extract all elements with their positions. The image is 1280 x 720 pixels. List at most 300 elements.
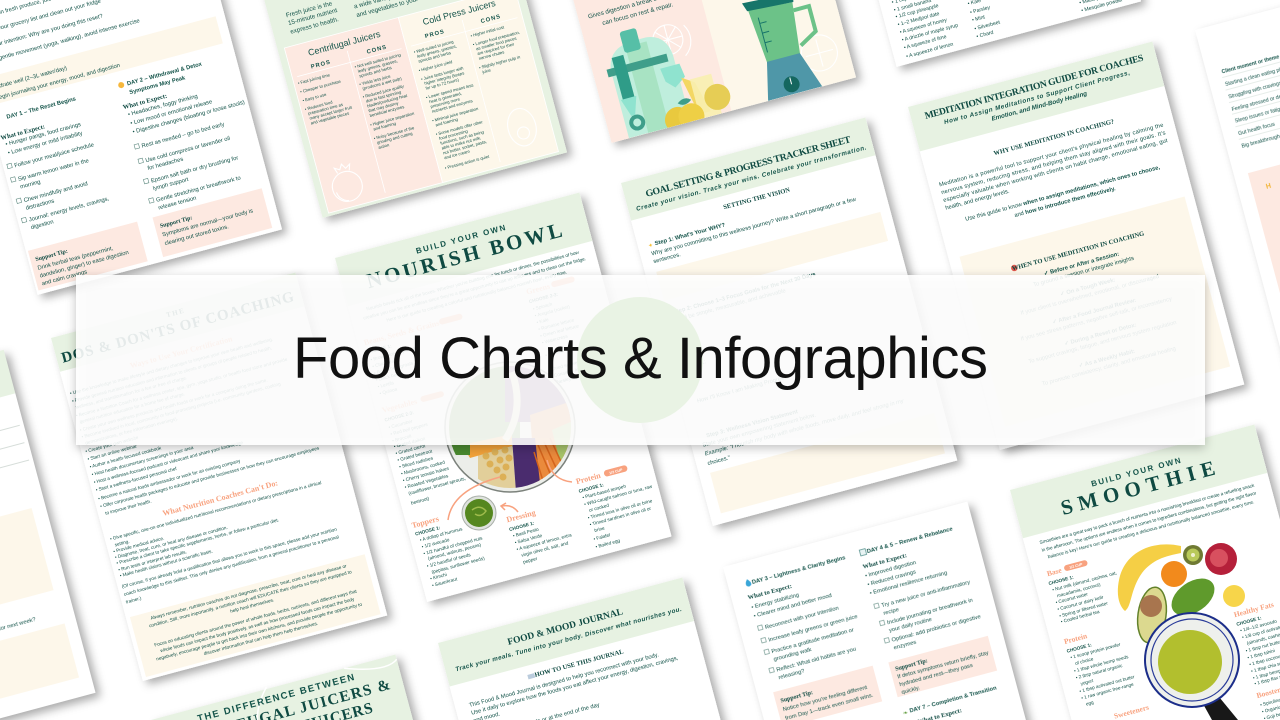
section: healthy fats: • 1 tbsp tahini — [1247, 648, 1275, 660]
section: base — [1045, 552, 1126, 625]
header band: DOS & DON'TS OF COACHING — [60, 289, 296, 367]
section: healthy fats: Healthy Fats — [1233, 600, 1275, 619]
step 2: Should be simple, measurable, and achievable — [669, 288, 787, 325]
section: vegetables: • Mushrooms, cooked — [400, 460, 446, 476]
section: dressing: Dressing — [505, 508, 536, 524]
section: dressing: • Basil Pesto — [512, 527, 540, 538]
section: toppers: (almond, walnuts, pecans) — [427, 542, 482, 561]
panel: when to use: ✓ Before or After a Session: — [1043, 251, 1120, 277]
section: toppers: • 1/2 handful of chopped nuts — [423, 535, 484, 556]
icon: lemon outline right — [797, 31, 842, 75]
list: can do — [85, 390, 322, 517]
section: dressing: • A squeeze of lemon, extra — [516, 532, 573, 552]
section: grains: • Lentils — [377, 380, 395, 389]
intro paragraph: health, and energy levels. — [945, 189, 1011, 212]
step 2: Step 2: Choose 1–3 Focus Goals for the Next 30 Days — [673, 272, 816, 316]
arrow: dressing to pesto — [501, 503, 518, 512]
panel: cold press juicers: and ice cream — [444, 148, 471, 160]
juicer caption — [587, 0, 689, 30]
panel: centrifugal juicers: blades/producing heat — [367, 93, 408, 108]
panel: centrifugal juicers: due to fast spinning — [365, 89, 402, 104]
section: vegetables: Vegetables — [381, 397, 418, 415]
panel: cold press juicers: narrow chutes — [478, 49, 505, 61]
day 2 support tip: Symptoms are normal—your body is — [162, 208, 254, 238]
step 2: How I'll Know I am Making Progress: — [696, 374, 789, 405]
day 4 and 5 column: Optional: add probiotics or digestive — [891, 614, 982, 644]
day 1 support tip: Support Tip: — [35, 249, 69, 263]
section heading: SETTING THE VISION — [723, 187, 791, 211]
section: base: 1/2 CUP — [1069, 562, 1084, 570]
list: fruit and sweeteners: • A drizzle of maple syrup — [901, 23, 959, 43]
intro paragraph: Meditation is a powerful tool to support your client's physical healing by calming the — [939, 123, 1164, 188]
page: detox plan days 1 and 2 — [0, 0, 282, 295]
day 2 column: Symptoms May Peak — [129, 75, 187, 96]
panel: centrifugal juicers: and foaming — [373, 121, 397, 132]
day 2 column: What to Expect: — [122, 93, 168, 111]
day 4 and 5 column: enzymes — [893, 640, 917, 651]
section: vegetables: • Cherry tomato halves — [402, 466, 450, 483]
intro paragraph — [939, 123, 1177, 236]
section: greens: • Watercress — [541, 333, 569, 345]
panel: cold press juicers: leafy greens, grasses, — [416, 43, 457, 59]
section: protein: • Tinned sardines in olive oil or — [589, 506, 652, 527]
section: greens: • Parsley leaves — [552, 372, 586, 386]
how to use heading: HOW TO USE THIS JOURNAL — [534, 648, 625, 679]
section: ways to use certification: general nutrition education for a home fee of charge. — [79, 391, 186, 424]
step 3: choices." — [707, 455, 731, 467]
banner title: Food Charts & Infographics — [293, 326, 988, 391]
panel: centrifugal juicers: • Fast juicing time — [297, 72, 331, 86]
day 3 support tip — [773, 666, 882, 720]
section: dressing: pepper — [522, 556, 538, 565]
header band: GOAL SETTING & PROGRESS TRACKER SHEET — [644, 134, 852, 200]
list: greens: • Parsley — [969, 5, 991, 16]
section: vegetables: • Grated carrot — [395, 443, 426, 456]
pink panel: H — [1265, 183, 1272, 191]
panel: centrifugal juicers: leafy greens, grasses, — [357, 58, 398, 74]
section: greens: • Arugula (rocket) — [534, 304, 571, 318]
list: cannot do: • Run tests or interpret lab results. — [118, 549, 187, 572]
icon: open book — [527, 673, 535, 679]
panel: centrifugal juicers: and vegetable pieces — [310, 111, 350, 126]
icon: pomegranate outline — [327, 160, 366, 205]
step 1: Step 1: What's Your WHY? — [654, 222, 726, 247]
panel: centrifugal juicers: beneficial enzymes — [369, 104, 405, 118]
section: toppers — [411, 504, 492, 589]
icon: sun — [118, 81, 125, 89]
cream reminder box: negatively, encourage people to get back into their own kitchens, and provide people the opportunity to — [156, 602, 363, 662]
section: greens: CHOOSE 2-3: — [528, 292, 559, 304]
day 1 column: • Hunger pangs, food cravings — [5, 122, 82, 148]
section: vegetables: (cauliflower, brussel sprouts, — [408, 476, 466, 496]
panel: centrifugal juicers: preparation time as — [307, 102, 343, 116]
illustration: smoothie ingredients — [1118, 543, 1245, 645]
day 4 and 5 column: • Emotional resilience returning — [869, 570, 948, 597]
section: grains: • Quinoa — [379, 386, 398, 396]
section: protein: • Wild-caught salmon or tuna, raw — [584, 484, 653, 507]
panel: cold press juicers: • Minimal juice separation — [432, 106, 479, 123]
section: greens: • Dried seaweed — [549, 358, 583, 372]
panel: when to use: If your client is overwhelmed, emotional, or discouraged — [1020, 274, 1160, 317]
list: can do: • Start a wellness-focused personal chef — [95, 466, 178, 492]
title — [166, 664, 397, 720]
intro text: Smoothies are a great way to pack a bunch of nutrients into a nourishing breakfast or create a refueling snack — [1039, 483, 1255, 545]
header band — [621, 118, 875, 221]
day 1 column: morning — [20, 179, 41, 191]
section: base: CHOOSE 1: — [1048, 575, 1075, 586]
list: can do: • Offer corporate health packages to educate and provide businesses on how they can encourage employees — [100, 445, 320, 509]
panel: centrifugal juicers: PROS — [310, 60, 332, 71]
panel: cold press juicers: food processing — [438, 128, 469, 141]
cream note box — [0, 16, 223, 104]
section: greens: • Coriander leaves — [550, 364, 589, 379]
list: cannot do: trainer.) — [125, 595, 142, 605]
section: vegetables: CHOOSE 2-3: — [384, 410, 415, 423]
intro text: Nourish bowls tick all of the boxes. Whether you're building one for lunch or dinner, the possibilities of how — [366, 250, 580, 312]
section: vegetables: beetroot) — [410, 496, 430, 506]
day 4 and 5 column: What to Expect: — [862, 552, 908, 571]
day 3 column: Practice a gratitude meditation or — [771, 627, 855, 655]
section: grains: CHOOSE 1: — [366, 343, 393, 355]
panel: centrifugal juicers: grinding and cutting — [376, 131, 414, 145]
section: base: • Cooled herbal tea — [1060, 609, 1100, 624]
section: greens: • Spinach — [532, 301, 553, 311]
day 2 column: DAY 2 – Withdrawal & Detox — [126, 61, 203, 87]
section: ways to use certification: demonstrations, or free information evenings). — [85, 416, 178, 446]
day 4 and 5 column: DAY 4 & 5 – Renew & Rebalance — [866, 526, 954, 555]
panel: cold press juicers: heat is generated, — [429, 91, 462, 104]
step 3: State your own empowering statement below. — [702, 413, 817, 449]
page: detox plan days 3 to 7 — [723, 502, 1059, 720]
panel: when to use: ✓ During a Reset or Detox: — [1064, 322, 1137, 347]
table — [1220, 42, 1280, 150]
header band — [438, 578, 694, 686]
list: greens: • Mint — [971, 14, 986, 24]
panel: cold press juicers: • Some models offer other — [435, 119, 484, 137]
icon: water drop — [745, 578, 752, 587]
panel: cold press juicers: for up to 72 hours) — [425, 77, 460, 91]
section: ways to use certification: • Create your own wellness products and health foods or work for a company doing the same. — [79, 377, 268, 433]
panel: centrifugal juicers: • Noisy because of the — [373, 125, 415, 141]
section: protein: egg — [1085, 700, 1095, 707]
list: cannot do: • Prescribe a client to take specific supplements, herbs, or follow a particular diet. — [116, 517, 280, 566]
day 4 and 5 column: your daily routine — [888, 617, 933, 634]
section: base: • Nut milk (almond, cashew, oat, — [1052, 570, 1117, 592]
panel: cold press juicers: preserving more — [430, 96, 461, 109]
section: grains: Beans, Seeds & Grains — [363, 318, 440, 347]
day 4 and 5 column: • Improved digestion — [865, 560, 917, 579]
day 3 support tip: Support Tip: — [780, 690, 814, 705]
day 4 and 5 support tip: If detox symptoms return briefly, stay — [897, 650, 990, 680]
day 1 support tip: Drink herbal teas (peppermint, — [37, 246, 114, 272]
section: grains: • Black beans — [375, 370, 405, 382]
page: dos and donts of coaching — [51, 273, 387, 681]
day 1 column: • Low energy or mild irritability — [7, 131, 83, 157]
juicer caption: can focus on rest & repair. — [602, 1, 674, 27]
cream box lower — [0, 623, 79, 720]
day 4 and 5 column: Include journaling or breathwork in — [886, 598, 974, 626]
day 1 column — [0, 95, 112, 233]
header band — [0, 350, 15, 456]
intro paragraph: Use this guide to know when to assign meditations, which ones to choose, — [965, 165, 1161, 223]
section: dressing: CHOOSE 1: — [509, 520, 535, 532]
day 1 column: Journal: energy levels, cravings, — [28, 196, 110, 223]
section: vegetables: • Cucumber — [388, 418, 413, 430]
day 2 column: • Headaches, foggy thinking — [127, 94, 199, 118]
section: protein — [1063, 622, 1139, 708]
section: grains: • Chickpeas — [372, 358, 398, 369]
page: juicer difference poster — [150, 653, 421, 720]
day 2 column: release tension — [158, 196, 197, 212]
day 4 and 5 column — [859, 525, 984, 654]
panel: cold press juicers: nut butter, sorbet, pasta, — [442, 139, 487, 155]
panel: cold press juicers: sprouts and herbs — [418, 50, 451, 64]
section: vegetables: • Red bell peppers — [390, 422, 429, 437]
panel: cold press juicers: CONS — [480, 14, 502, 25]
section: greens — [525, 275, 600, 386]
section: protein: • Plant-based tempeh — [582, 483, 627, 500]
step 1 — [647, 183, 888, 301]
section: vegetables: • Sliced radishes — [399, 455, 434, 469]
section: vegetables: • Roasted Vegetables — [404, 473, 449, 490]
section: protein: • Falafel — [593, 532, 611, 542]
step 3: Example: "I nourish my body with whole foods, move daily, and feel strong in my — [704, 398, 906, 457]
list: can do: • Create your own website — [85, 435, 139, 454]
day 3 column: • Clearer mind and better mood — [753, 593, 833, 620]
cream reminder box: whole foods can impact the body positively, as well as how processed foods can impact the body — [160, 596, 355, 653]
header band: Emotion, and Mind-Body Healing — [991, 90, 1088, 123]
panel: when to use: To promote consistency, clarity, and emotional healing — [1042, 346, 1177, 388]
day 1 column: digestion — [30, 219, 54, 231]
list: greens: • Chard — [976, 30, 994, 40]
section: protein: Protein — [1063, 631, 1089, 646]
section: dressing: • Salsa Verde — [514, 533, 543, 545]
day 2 support tip: clearing out stored toxins. — [164, 224, 230, 247]
section: toppers: Toppers — [411, 514, 440, 530]
panel: when to use: ✓ After a Food Journal Review: — [1052, 298, 1137, 326]
panel: centrifugal juicers: • Easy to use — [302, 92, 328, 103]
panel: centrifugal juicers: • Cheaper to purchase — [300, 78, 342, 94]
day 4 and 5 support tip: Support Tip: — [895, 658, 928, 673]
section: protein: • Tinned tuna in olive oil or brine — [587, 498, 653, 520]
step 3: Step 3: Wellness Vision Statement — [706, 409, 799, 439]
day 4 and 5 column: • Reduced cravings — [867, 569, 917, 588]
day 1 support tip: dandelion, ginger) to ease digestion — [39, 250, 130, 280]
list: fruit and sweeteners: • A squeeze of honey — [899, 17, 948, 36]
section: toppers: CHOOSE 1: — [415, 525, 441, 537]
cream reminder box: discover information that can help them help themselves. — [203, 621, 319, 656]
list: cannot do: • Give specific, one-on-one individualized nutritional recommendations or dietary prescriptions in a clinical — [109, 480, 322, 541]
section: toppers: • 1/2 avocado — [421, 537, 450, 549]
illustration: pesto dish — [462, 496, 496, 530]
section: protein: CHOOSE 1: — [578, 482, 605, 494]
section: protein: • 1 tbsp whole hemp seeds — [1073, 654, 1130, 674]
cream box upper — [0, 508, 54, 647]
day 2 support tip: Support Tip: — [159, 215, 193, 230]
table: Gut health focus — [1238, 122, 1276, 137]
panel: cold press juicers: PROS — [424, 29, 446, 40]
day 3 column: • Energy stabilizing — [751, 592, 800, 611]
day 4 and 5 column: Try a new juice or anti-inflammatory — [881, 580, 971, 609]
section: vegetables: • Broccoli — [392, 433, 412, 443]
section: ways to use certification: • Become involved in local, community or food-promoting projects (i.e. community gardens, cooking — [81, 381, 282, 439]
day 3 column: Increase leafy greens or green juice — [768, 614, 858, 644]
section: grains — [363, 312, 477, 397]
section: grains: • Buckwheat groats — [374, 360, 414, 376]
panel: cold press juicers: • Juice lasts longer with — [420, 65, 464, 82]
panel: cold press juicers: as smaller food pieces — [475, 36, 517, 51]
panel: centrifugal juicers: • Reduced juice quality — [362, 83, 405, 99]
day 2 column — [117, 53, 266, 214]
cream reminder box: Focus on educating clients around the power of whole foods, herbs, nutrients, and different ways that — [154, 588, 358, 648]
list: greens: • Silverbeet — [974, 20, 1001, 32]
panel: cold press juicers: functions, such as being — [440, 129, 485, 146]
section: protein: 1/2 CUP — [609, 468, 624, 475]
section: toppers: • A dollop of hummus — [419, 526, 464, 543]
day 3 column: Reconnect with your intention — [764, 606, 840, 631]
banner green circle — [577, 297, 703, 423]
cream reminder box: help heal themselves. — [230, 597, 275, 614]
day 3 column: Reflect: What old habits are you — [776, 646, 857, 674]
cream reminder box — [130, 554, 381, 677]
section: greens: • Green leaf lettuce — [540, 323, 580, 338]
panel: centrifugal juicers: sprouts and herbs — [359, 65, 392, 78]
panel: when to use: ✓ On a Tough Week: — [1060, 277, 1116, 298]
header band — [1010, 425, 1267, 538]
panel: cold press juicers: • Pressing action is quiet — [444, 154, 490, 170]
header band: BUILD YOUR OWN — [415, 223, 508, 256]
panel: centrifugal juicers: Centrifugal Juicers — [307, 29, 382, 58]
illustration: nourish bowl — [445, 362, 575, 492]
header band: NOURISH BOWL — [364, 217, 568, 293]
list: cannot do: • Provide medical advice. — [113, 536, 165, 554]
day 2 column: • Low mood or emotional release — [130, 99, 213, 127]
day 1 column: distractions — [25, 198, 55, 212]
section: protein: • 1 raw organic free-range — [1081, 682, 1134, 701]
section: protein: Protein — [575, 471, 602, 486]
section: base: macadamia, coconut) — [1056, 582, 1101, 598]
list: fruit and sweeteners: • A squeeze of lime — [903, 34, 947, 51]
header band: BUILD YOUR OWN — [1090, 456, 1183, 489]
header band: THE — [165, 306, 186, 319]
panel: cold press juicers: and foaming — [435, 116, 459, 127]
list: can do: • Author a health-focused cookbook — [89, 445, 162, 469]
section: vegetables: • Grated daikon — [393, 436, 426, 449]
section: vegetables: • Grated beetroot — [397, 448, 433, 463]
panel: cold press juicers: • Higher juice yield — [418, 59, 453, 73]
panel: centrifugal juicers: CONS — [366, 44, 388, 56]
section: protein — [575, 459, 665, 550]
day 1 support tip: and calm cravings — [41, 269, 88, 287]
cream reminder box: condition. Still, more importantly, a nutrition coach will EDUCATE their clients so they are equipped to — [148, 569, 353, 628]
writing lines — [0, 425, 29, 491]
section: ways to use certification: • Provide general nutrition education and information to clients or groups of people related to health, — [71, 345, 272, 404]
panel: when to use — [960, 196, 1230, 427]
day 1 column: Sip warm lemon water in the — [17, 158, 90, 183]
panel: when to use: If you see stress patterns, negative self-talk, or inconsistency — [1020, 296, 1173, 343]
panel: when to use: WHEN TO USE MEDITATION IN COACHING — [1011, 230, 1145, 272]
panel: centrifugal juicers: action — [378, 142, 390, 150]
panel: when to use: To support cravings, fatigue, and nervous system regulation — [1028, 320, 1177, 365]
page: left partial worksheet — [0, 350, 96, 720]
section: grains: • Brown rice or quinoa — [370, 345, 416, 362]
section: protein: of choice — [1074, 656, 1094, 666]
panel: cold press juicers: nutrients and enzymes — [431, 98, 473, 114]
intro text: balance is key! Here's our guide to creating a delicious and nutritionally balanced smoothie, every time. — [1047, 499, 1255, 559]
panel: centrifugal juicers: that may destroy — [368, 100, 400, 113]
section: ways to use certification: Ways to Use Your Certification — [129, 334, 234, 370]
intro text: creative you can be are endless since they're a great opportunity to use up leftovers and to clean out the fridge. — [363, 256, 587, 321]
section: protein: or cooked — [588, 503, 610, 513]
day 3 column: releasing? — [778, 668, 806, 681]
day 7 heading: DAY 7 – Completion & Transition — [909, 685, 998, 714]
page: food and mood journal — [438, 578, 774, 720]
section: greens: • Sprouts — [545, 348, 565, 358]
list: greens — [965, 0, 1011, 40]
icon: avocado outline — [504, 105, 540, 149]
section: base: • Spring or filtered water — [1059, 601, 1109, 618]
panel: cold press juicers: juice — [481, 67, 492, 75]
panel: cold press juicers: • Lower speed means less — [425, 82, 474, 100]
list: cannot do: • Diagnose, treat, cure, or heal any disease or condition. — [114, 525, 228, 560]
list: fruit and sweeteners: • 1–2 Medjool date — [897, 11, 940, 28]
illustration: blender — [742, 0, 830, 101]
section: greens: • Romaine lettuce — [538, 317, 575, 332]
day 1 column: DAY 1 – The Reset Begins — [6, 96, 77, 121]
section: ways to use certification — [66, 322, 296, 446]
section: protein: • 1 scoop protein powder — [1070, 642, 1121, 660]
intro text — [285, 0, 432, 37]
day 1 support tip — [28, 222, 148, 290]
intro text: 15-minute nutrient — [287, 7, 338, 27]
panel: centrifugal juicers: • Higher juice separation — [370, 111, 415, 127]
section: greens: Greens — [525, 282, 551, 296]
day 7 heading: ❧ — [903, 710, 909, 717]
step 2 — [667, 272, 840, 406]
page: juicer and blender illustration — [572, 0, 865, 150]
section: healthy fats — [1233, 596, 1280, 687]
panel: centrifugal juicers: (produces a wet pulp) — [362, 76, 403, 91]
panel: centrifugal juicers: many accept larger fruit — [309, 104, 353, 121]
header band — [908, 42, 1164, 151]
pink half — [517, 0, 731, 143]
panel: cold press juicers: • Higher initial cost — [470, 24, 505, 38]
intro text: Here is our guide to creating a colorful and nutritionally balanced nourish bowl, every time. — [386, 270, 568, 323]
intro paragraph: especially valuable when working with clients on habit change, emotional eating, gut — [943, 138, 1169, 204]
day 2 column: Gentle stretching or breathwork to — [156, 175, 241, 204]
header band: How to Assign Meditations to Support Client Progress, — [943, 70, 1131, 126]
panel: cold press juicers: • Well-suited to juicing — [413, 39, 455, 55]
page: smoothie builder — [1010, 425, 1280, 720]
panel: cold press juicers: able to make nut milk, — [441, 135, 482, 151]
panel: centrifugal juicers: • Not well suited to juicing — [354, 52, 402, 69]
panel: when to use: To ground a session or integrate insights — [1033, 256, 1135, 289]
section: toppers: • 1/2 handful of seeds — [426, 552, 472, 569]
body text: Use it daily to explore how the foods you eat affect your energy, digestion, cravings, — [471, 655, 679, 717]
panel: cold press juicers — [398, 0, 559, 183]
header band: FOOD & MOOD JOURNAL — [507, 607, 624, 648]
header band: MEDITATION INTEGRATION GUIDE FOR COACHES — [924, 53, 1145, 122]
section: base: • Coconut or dairy kefir — [1057, 594, 1104, 612]
section: ways to use certification: wellness, and transformation for a fee or free of charge. — [75, 375, 188, 410]
list: fruit and sweeteners: • 1/2 cup pineapple — [895, 3, 939, 20]
day 2 column: for headaches — [147, 157, 184, 172]
step 3 — [700, 375, 945, 513]
day 4 and 5 column: recipe — [883, 607, 900, 617]
day 3 column: DAY 3 – Lightness & Clarity Begins — [751, 555, 846, 586]
list: can do: • Start an online webinar — [87, 443, 138, 462]
list: cannot do: • Make health claims without a scientific basis. — [119, 549, 213, 578]
